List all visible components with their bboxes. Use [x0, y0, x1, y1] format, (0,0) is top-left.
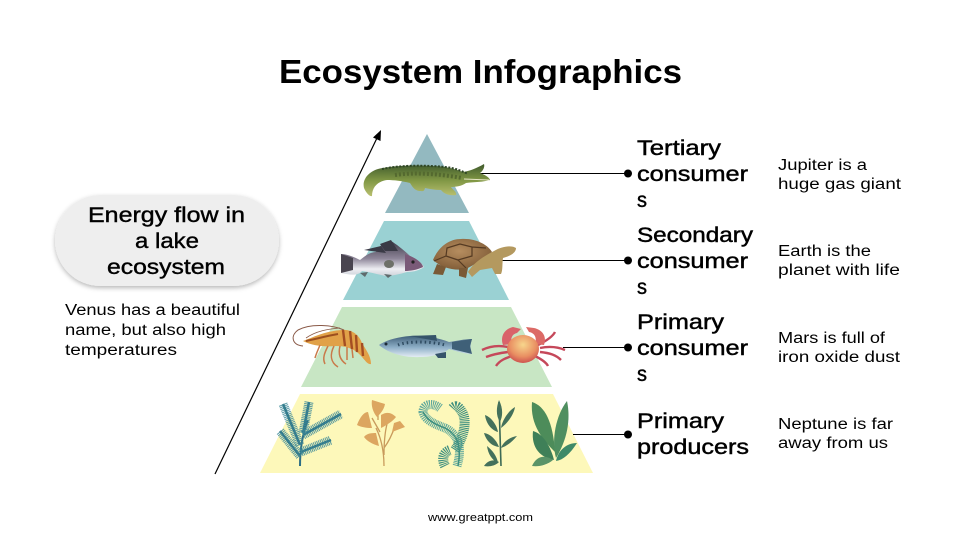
footer url: www.greatppt.com: [427, 512, 533, 524]
label: tertiary consumers: s: [637, 189, 647, 212]
text block: Neptune: Neptune is far: [778, 416, 893, 433]
icon: seaweed dark sprig: [484, 400, 517, 466]
text block: Jupiter: Jupiter is a: [778, 157, 867, 174]
label: primary producers: [637, 410, 749, 459]
label: primary producers: producers: [637, 436, 749, 459]
text block: energy flow description: temperatures: [65, 342, 177, 359]
text block: Earth: [778, 243, 900, 279]
panel: energy flow pill: Energy flow in: [88, 204, 245, 227]
icon: crab: [482, 327, 565, 366]
text block: energy flow description: Venus has a beautiful: [65, 302, 240, 319]
leader line: tertiary: [478, 170, 632, 178]
icon: seaweed green curls: [423, 405, 465, 466]
leader line: primary producers: [573, 430, 632, 438]
label: tertiary consumers: consumer: [637, 163, 748, 186]
label: primary consumers: Primary: [637, 311, 725, 334]
label: secondary consumers: s: [637, 276, 647, 299]
text block: Neptune: away from us: [778, 435, 888, 452]
title: Ecosystem Infographics: [279, 53, 682, 90]
pyramid tier: primary consumers: [301, 307, 552, 387]
text block: energy flow description: [65, 302, 240, 359]
label: primary consumers: s: [637, 363, 647, 386]
icon: seaweed golden fans: [357, 400, 405, 466]
pyramid tier: primary producers: [260, 394, 593, 473]
text block: Mars: Mars is full of: [778, 330, 886, 347]
panel: energy flow pill: ecosystem: [107, 256, 225, 279]
text block: Earth: Earth is the: [778, 243, 871, 260]
pyramid tier: tertiary: [385, 134, 469, 213]
icon: seaweed blue fern: [280, 402, 341, 466]
panel: energy flow pill: [55, 195, 279, 286]
text block: Jupiter: [778, 157, 902, 193]
text block: Neptune: [778, 416, 893, 452]
icon: shrimp: [293, 325, 371, 367]
text block: Jupiter: huge gas giant: [778, 176, 902, 193]
arrow: energy direction: [215, 130, 381, 474]
label: tertiary consumers: Tertiary: [637, 137, 722, 160]
label: secondary consumers: [637, 224, 754, 299]
panel: energy flow pill: a lake: [135, 230, 199, 253]
label: primary consumers: [637, 311, 748, 386]
icon: trout fish: [379, 335, 472, 358]
icon: bass fish: [341, 240, 424, 278]
label: tertiary consumers: [637, 137, 748, 212]
label: primary producers: Primary: [637, 410, 725, 433]
icon: seaweed broad leaves: [532, 401, 577, 466]
text block: Mars: [778, 330, 901, 366]
leader line: primary consumers: [563, 344, 632, 352]
leader line: secondary: [502, 256, 632, 264]
pyramid tier: secondary: [343, 221, 509, 300]
label: secondary consumers: consumer: [637, 250, 748, 273]
text block: energy flow description: name, but also high: [65, 322, 226, 339]
label: secondary consumers: Secondary: [637, 224, 754, 247]
label: primary consumers: consumer: [637, 337, 748, 360]
icon: turtle: [433, 239, 516, 278]
icon: crocodile: [364, 164, 490, 196]
text block: Mars: iron oxide dust: [778, 349, 901, 366]
text block: Earth: planet with life: [778, 262, 900, 279]
